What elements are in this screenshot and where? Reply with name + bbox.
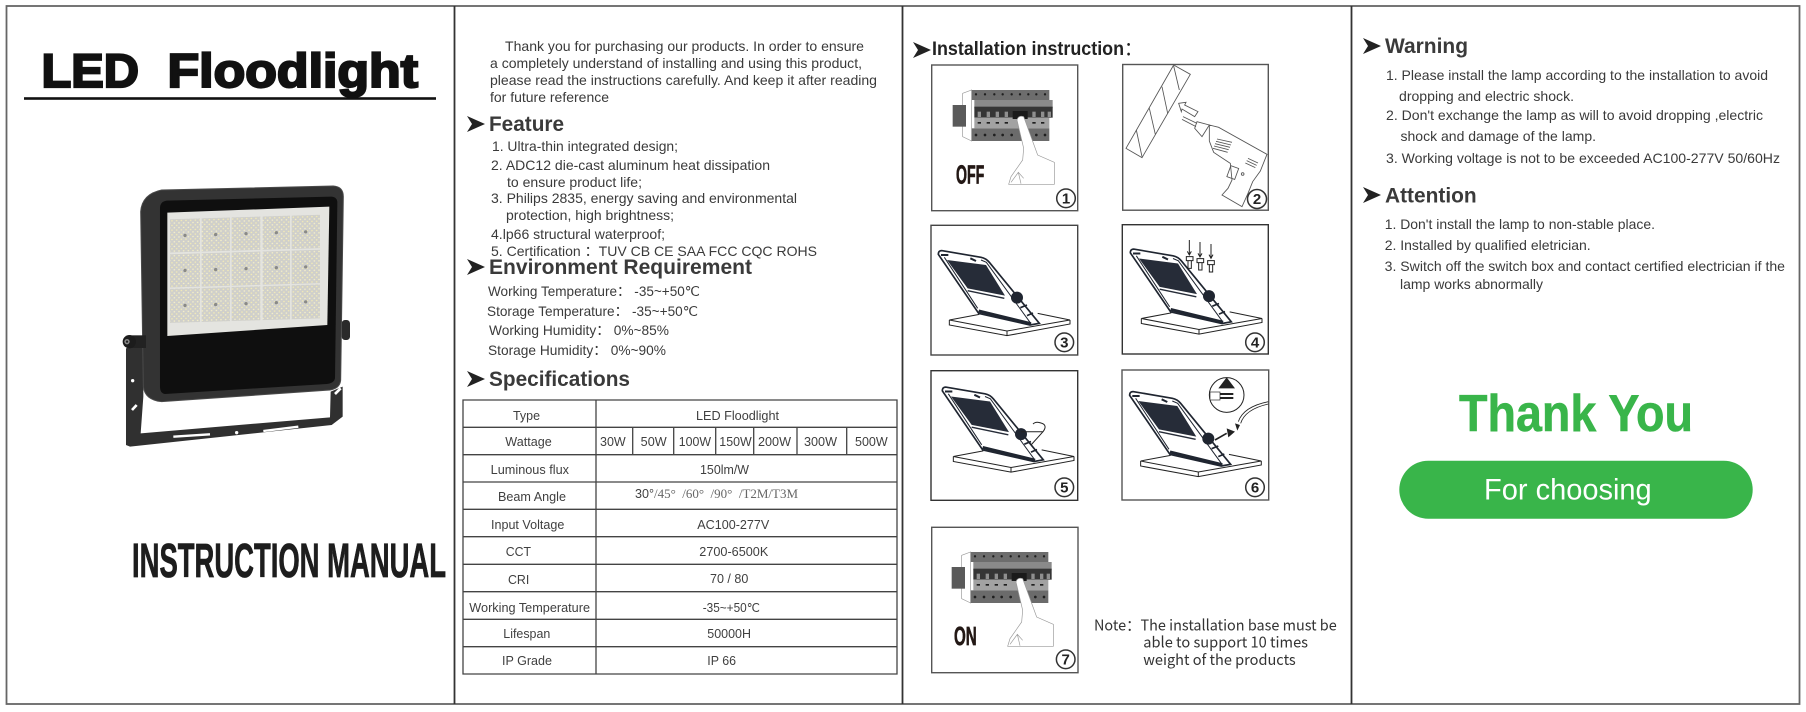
step 5: adjust with hook: 5 [1060,480,1068,496]
panel: introduction, feature and specifications [463,38,897,674]
table labels: CRI [508,573,529,587]
title: Floodlight [168,44,418,97]
thank you heading: Thank You [1459,385,1693,443]
step 1: switch off: 1 [1062,190,1070,208]
table labels: Type [513,409,540,423]
title [42,44,418,97]
environment list: Working Temperature： -35~+50℃ [488,283,700,300]
title underline [24,97,436,100]
heading: warning: Warning [1385,35,1468,58]
attention list: 3. Switch off the switch box and contact certified electrician if the [1385,258,1785,274]
for choosing pill: For choosing [1484,473,1652,506]
step 6: connect cable: 6 [1251,480,1259,496]
note: Note：The installation base must be [1094,615,1337,636]
table values: 500W [855,435,888,449]
table values: -35~+50℃ [703,601,760,615]
table values: 300W [804,435,837,449]
panel: installation instruction [913,39,1337,673]
for choosing pill [1399,461,1753,519]
table values: 200W [758,435,791,449]
table labels: Working Temperature [469,601,590,615]
table grid [463,400,897,674]
heading: installation instruction: Installation instruction： [932,39,1142,60]
environment list: Storage Humidity： 0%~90% [488,342,666,358]
warning list: dropping and electric shock. [1399,88,1574,104]
warning list: 3. Working voltage is not to be exceeded AC100-277V 50/60Hz [1386,150,1780,166]
attention list: 2. Installed by qualified eletrician. [1385,237,1591,253]
table labels: Beam Angle [498,490,566,504]
step 7: switch on: ON [954,621,977,651]
step 2: drill holes [1123,64,1268,210]
intro text: for future reference [490,89,609,105]
feature list: protection, high brightness; [506,207,674,223]
table labels: Wattage [505,435,552,449]
table values: 50W [641,435,667,449]
environment list [487,283,700,358]
attention list [1385,216,1785,292]
warning list [1386,67,1780,166]
attention list: 1. Don't install the lamp to non-stable place. [1385,216,1655,232]
step 4: fasten screws: 4 [1251,334,1260,352]
feature list: 3. Philips 2835, energy saving and environmental [491,190,797,206]
heading: environment requirement: Environment Requirement [489,256,752,279]
table values: 100W [679,435,711,449]
table values: IP 66 [707,654,736,668]
table values: AC100-277V [697,518,770,532]
warning list: 2. Don't exchange the lamp as will to avoid dropping ,electric [1386,107,1763,123]
table values [600,409,888,668]
table values: 30° [635,487,654,501]
warning list: 1. Please install the lamp according to the installation to avoid [1386,67,1768,83]
table labels: IP Grade [502,654,552,668]
feature list: 1. Ultra-thin integrated design; [492,138,678,154]
environment list: Working Humidity： 0%~85% [489,322,669,338]
step 7: switch on [932,527,1078,673]
table values: LED Floodlight [696,409,779,423]
step 6: connect cable [1122,370,1269,500]
intro text: Thank you for purchasing our products. In order to ensure [505,38,864,54]
table labels: CCT [506,545,531,559]
heading: feature: Feature [489,113,564,136]
table labels: Luminous flux [491,463,570,477]
table labels [469,409,590,668]
table labels: Lifespan [503,627,550,641]
feature list: 5. Certification ：TUV CB CE SAA FCC CQC ROHS [491,243,817,259]
subtitle: INSTRUCTION MANUAL [132,535,446,588]
table values: 2700-6500K [699,545,769,559]
table values: 150lm/W [700,463,749,477]
panel: warning, attention and thank you [1363,35,1785,519]
attention list: lamp works abnormally [1400,276,1543,292]
table values: 150W [719,435,752,449]
feature list: 4.lp66 structural waterproof; [491,226,665,242]
note [1094,615,1337,670]
table values: /45° /60° /90° /T2M/T3M [654,487,798,501]
table values: 30W [600,435,626,449]
intro text [490,38,877,105]
note: able to support 10 times [1143,632,1308,653]
step 5: adjust with hook [931,371,1078,500]
step 1: switch off: OFF [956,159,984,189]
step 1: switch off [932,65,1078,211]
table labels: Input Voltage [491,518,564,532]
table values: 70 / 80 [710,572,748,586]
note: weight of the products [1143,649,1296,670]
step 4: fasten screws [1122,225,1268,354]
warning list: shock and damage of the lamp. [1400,128,1596,144]
step 2: drill holes: 2 [1253,191,1261,208]
step 3: place lamp on base: 3 [1060,334,1068,352]
feature list: 2. ADC12 die-cast aluminum heat dissipation [491,157,770,173]
step 3: place lamp on base [931,225,1078,355]
feature list [491,138,817,259]
panel: cover [24,44,446,588]
heading: attention: Attention [1385,185,1477,208]
environment list: Storage Temperature： -35~+50℃ [487,303,698,320]
specifications table [463,400,897,674]
feature list: to ensure product life; [507,174,642,190]
step 7: switch on: 7 [1062,652,1070,668]
intro text: please read the instructions carefully. And keep it after reading [490,72,877,88]
heading: specifications: Specifications [489,368,630,391]
product photo: floodlight [123,186,350,447]
title: LED [42,44,139,97]
table values: 50000H [707,627,751,641]
intro text: a completely understand of installing and using this product, [490,55,862,71]
